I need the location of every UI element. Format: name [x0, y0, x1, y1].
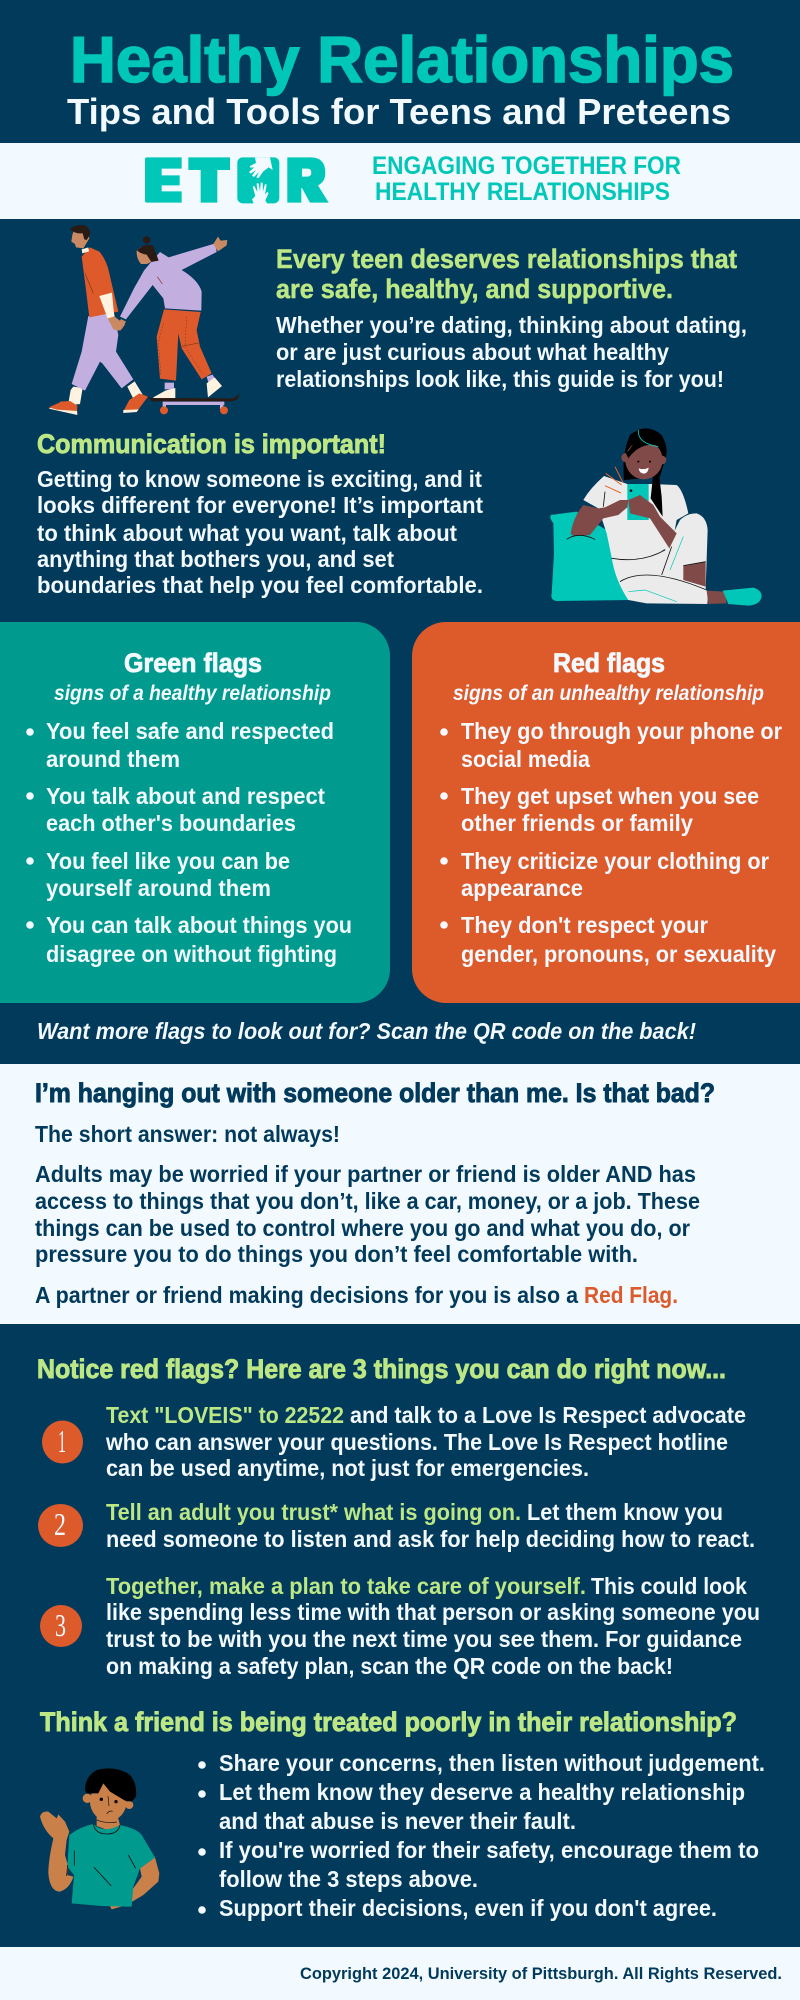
- text: step 1: who can answer your questions. The Love Is Respect hotline: [105, 1429, 728, 1455]
- text block: communication: Communication is important!: [37, 429, 386, 459]
- heading: notice red flags: Notice red flags? Here are 3 things you can do right now...: [37, 1354, 726, 1384]
- text: step 3: trust to be with you the next time you see them. For guidance: [106, 1626, 742, 1652]
- text: step 3: like spending less time with that person or asking someone you: [106, 1599, 760, 1625]
- list: friend advice: [198, 1750, 765, 1921]
- list: red flags: They criticize your clothing or: [461, 848, 769, 874]
- text block: explanation: Adults may be worried if your partner or friend is older AND has: [35, 1161, 696, 1187]
- text block: communication: to think about what you want, talk about: [37, 520, 457, 546]
- icon: number 2: [38, 1504, 83, 1547]
- icon: number 1: 1: [58, 1423, 66, 1459]
- list: red flags: [440, 718, 782, 967]
- icon: number 2: 2: [54, 1506, 66, 1542]
- panel: green flags: [0, 622, 390, 1003]
- step 2: [38, 1499, 755, 1552]
- icon: number 1: [42, 1420, 83, 1464]
- text block: communication: boundaries that help you feel comfortable.: [37, 572, 483, 598]
- list: friend advice: Share your concerns, then listen without judgement.: [219, 1750, 765, 1776]
- text block: short answer: The short answer: not always!: [35, 1121, 340, 1147]
- text block: explanation: [35, 1161, 700, 1267]
- title: [67, 23, 734, 132]
- heading: red flags: Red flags: [553, 648, 665, 678]
- text block: every teen: or are just curious about what healthy: [276, 339, 669, 365]
- text block: every teen: relationships look like, this guide is for you!: [276, 366, 724, 392]
- text: step 1: can be used anytime, not just for emergencies.: [106, 1455, 589, 1481]
- icon: number 3: 3: [55, 1607, 66, 1643]
- copyright: Copyright 2024, University of Pittsburgh. All Rights Reserved.: [300, 1964, 782, 1983]
- list: red flags: appearance: [461, 875, 583, 901]
- list: green flags: disagree on without fighting: [46, 941, 337, 967]
- list: friend advice: If you're worried for their safety, encourage them to: [219, 1837, 759, 1863]
- skateboard: [163, 402, 224, 409]
- text block: communication: Getting to know someone is exciting, and it: [37, 466, 482, 492]
- heading: green flags: [54, 648, 331, 705]
- text: step 1: and talk to a Love Is Respect advocate: [350, 1402, 746, 1428]
- heading: older partner: I’m hanging out with someone older than me. Is that bad?: [35, 1078, 715, 1108]
- text: step 2: Let them know you: [527, 1499, 723, 1525]
- heading: red flags: signs of an unhealthy relationship: [453, 682, 764, 705]
- logo tagline: HEALTHY RELATIONSHIPS: [375, 178, 670, 206]
- list: red flags: gender, pronouns, or sexuality: [461, 941, 776, 967]
- woman: [165, 375, 216, 389]
- illustration: woman with phone: [550, 428, 762, 606]
- callout: more flags: Want more flags to look out for? Scan the QR code on the back!: [37, 1018, 696, 1044]
- list: green flags: [26, 718, 352, 967]
- heading: red flags: [453, 648, 764, 705]
- list: green flags: You feel like you can be: [46, 848, 290, 874]
- text block: explanation: access to things that you don’t, like a car, money, or a job. These: [35, 1188, 700, 1214]
- illustration: couple with skateboard: [49, 225, 240, 415]
- man: [68, 387, 83, 405]
- text block: explanation: pressure you to do things you don’t feel comfortable with.: [35, 1241, 638, 1267]
- illustration: worried boy: [40, 1768, 159, 1909]
- text block: communication: [37, 429, 483, 598]
- panel: older partner: [0, 1064, 800, 1324]
- text: step 3: Together, make a plan to take care of yourself.: [106, 1573, 586, 1599]
- footer band: [0, 1947, 800, 2000]
- list: green flags: yourself around them: [46, 875, 271, 901]
- list: red flags: social media: [461, 746, 591, 772]
- list: red flags: other friends or family: [461, 810, 693, 836]
- panel: logo band: [0, 143, 800, 219]
- text: step 3: on making a safety plan, scan the QR code on the back!: [106, 1653, 673, 1679]
- text: step 3: [106, 1573, 760, 1679]
- list: green flags: You feel safe and respected: [46, 718, 334, 744]
- logo tagline: [372, 152, 681, 206]
- list: friend advice: Let them know they deserve a healthy relationship: [219, 1779, 745, 1805]
- list: friend advice: follow the 3 steps above.: [219, 1866, 478, 1892]
- step 3: [40, 1573, 760, 1679]
- icon: number 3: [40, 1605, 82, 1647]
- panel: red flags: [412, 622, 800, 1003]
- logo: ETHR: [145, 157, 329, 205]
- heading: green flags: Green flags: [124, 648, 262, 678]
- list: green flags: around them: [46, 746, 180, 772]
- list: friend advice: and that abuse is never their fault.: [219, 1808, 576, 1834]
- text: step 2: [106, 1499, 755, 1552]
- list: green flags: You can talk about things you: [46, 912, 352, 938]
- step 1: [42, 1402, 746, 1481]
- list: green flags: each other's boundaries: [46, 810, 296, 836]
- text: step 2: need someone to listen and ask for help deciding how to react.: [106, 1526, 755, 1552]
- list: red flags: They get upset when you see: [461, 783, 759, 809]
- title: Tips and Tools for Teens and Preteens: [67, 91, 731, 132]
- text: step 2: Tell an adult you trust* what is going on.: [106, 1499, 521, 1525]
- heading: green flags: signs of a healthy relationship: [54, 682, 331, 705]
- text block: red flag note: Red Flag.: [584, 1282, 678, 1308]
- text block: explanation: things can be used to control where you go and what you do, or: [35, 1215, 690, 1241]
- title: Healthy Relationships: [70, 23, 734, 96]
- heading: friend treated poorly: Think a friend is being treated poorly in their relationship?: [40, 1707, 737, 1737]
- text: step 1: Text "LOVEIS" to 22522: [106, 1402, 344, 1428]
- text block: red flag note: A partner or friend making decisions for you is also a: [35, 1282, 578, 1308]
- text block: every teen: are safe, healthy, and supportive.: [276, 274, 673, 304]
- text block: communication: anything that bothers you, and set: [37, 546, 394, 572]
- text: step 1: [105, 1402, 746, 1481]
- text: step 3: This could look: [591, 1573, 748, 1599]
- text block: every teen: Every teen deserves relationships that: [276, 244, 737, 274]
- logo tagline: ENGAGING TOGETHER FOR: [372, 152, 681, 180]
- list: friend advice: Support their decisions, even if you don't agree.: [219, 1895, 717, 1921]
- text block: communication: looks different for everyone! It’s important: [37, 492, 483, 518]
- text block: every teen: Whether you’re dating, thinking about dating,: [276, 312, 747, 338]
- list: red flags: They don't respect your: [461, 912, 708, 938]
- list: green flags: You talk about and respect: [46, 783, 325, 809]
- text block: every teen: [276, 244, 747, 392]
